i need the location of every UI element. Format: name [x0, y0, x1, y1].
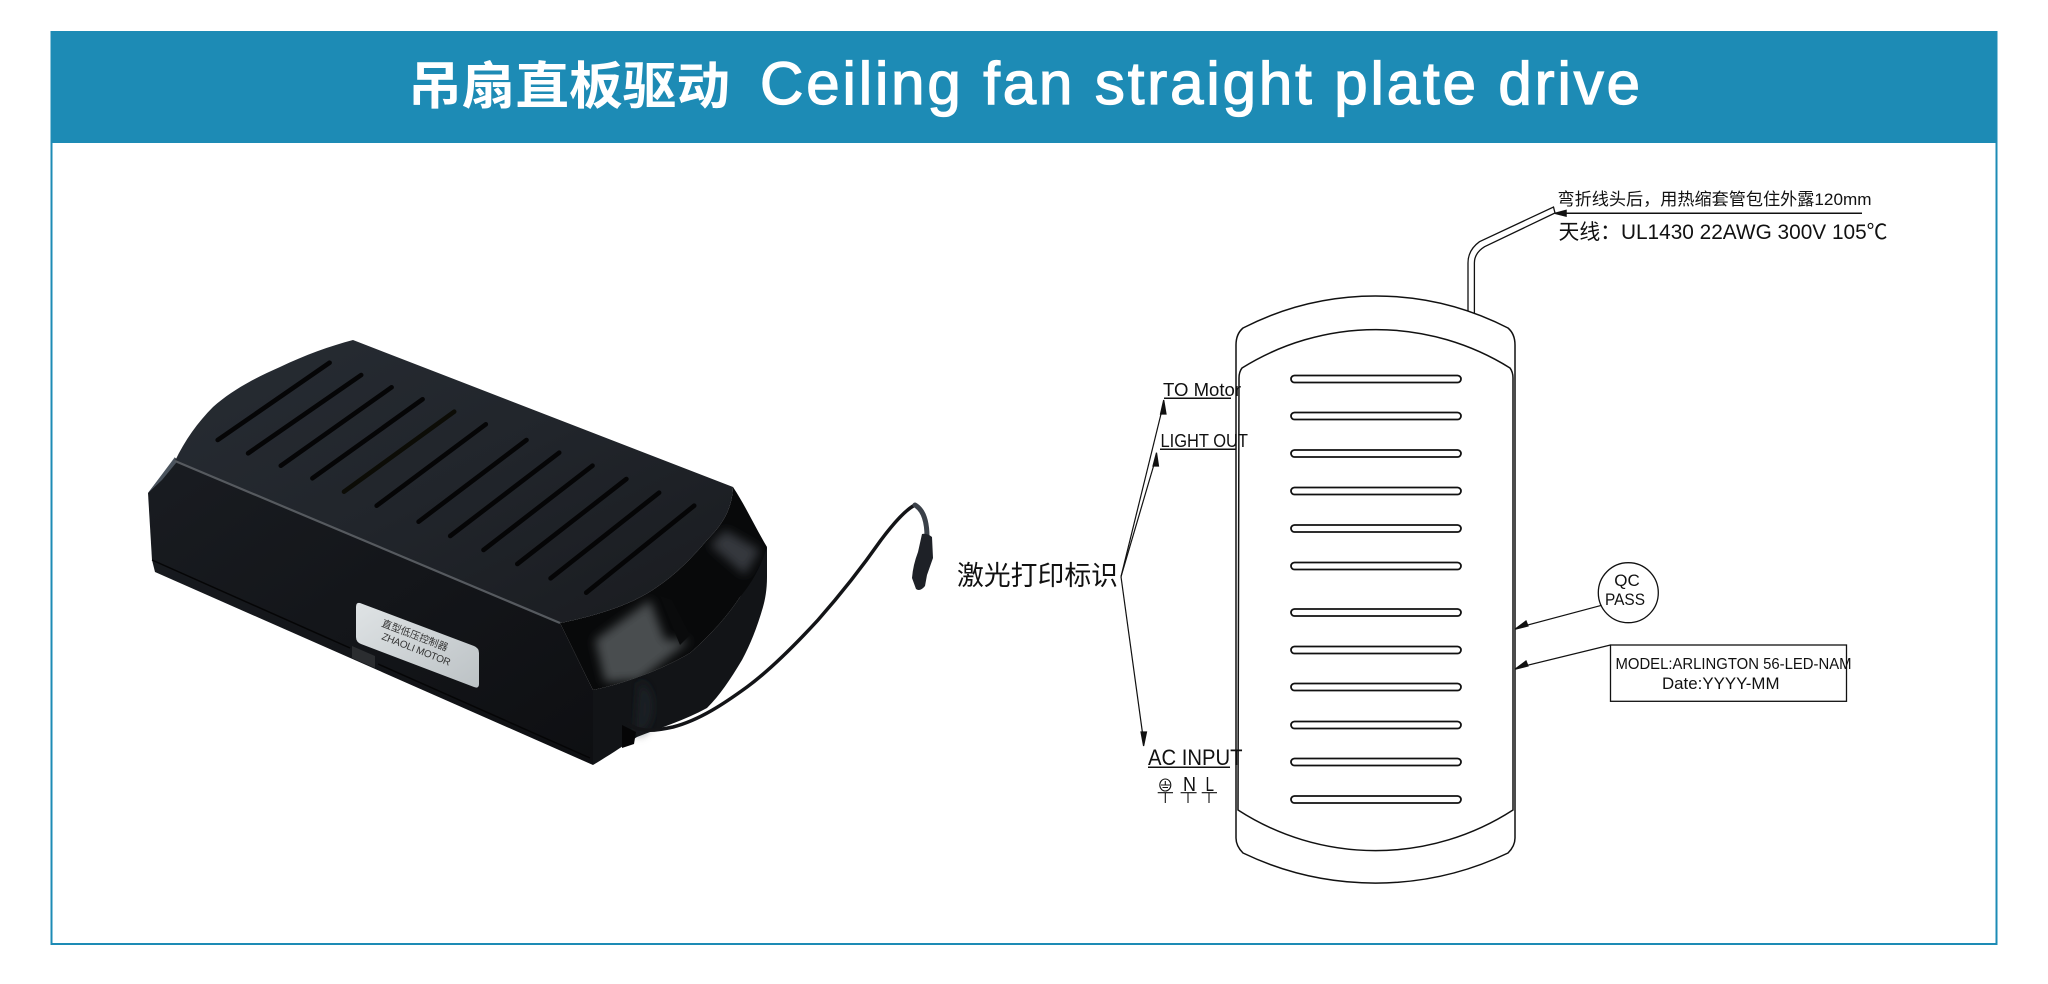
controller front face: [148, 458, 593, 765]
header band with title: 吊扇直板驱动: [408, 58, 730, 115]
model label arrow: [1515, 645, 1610, 669]
power cable: [627, 505, 915, 730]
technical drawing of the controller: [1121, 207, 1862, 883]
N pin label: N: [1183, 774, 1196, 796]
product photo: black controller box: [148, 340, 933, 765]
LIGHT OUT label: LIGHT OUT: [1160, 431, 1248, 451]
label underlines: [1148, 398, 1236, 767]
cable bend: [915, 505, 927, 537]
laser print leader arrows: [1121, 400, 1166, 746]
laser print mark label: 激光打印标识: [957, 561, 1118, 591]
product label: 直型低压控制器: [380, 617, 450, 654]
cable connector: [912, 534, 933, 590]
product label: [356, 603, 479, 688]
L pin label: L: [1206, 774, 1214, 796]
antenna bend note: 弯折线头后，用热缩套管包住外露120mm: [1558, 190, 1872, 209]
end cap glossy reflections: [595, 530, 760, 682]
side switch: [352, 646, 375, 668]
model text: MODEL:ARLINGTON 56-LED-NAM: [1616, 656, 1852, 673]
QC label: QC: [1614, 571, 1640, 590]
PASS label: PASS: [1605, 590, 1645, 609]
antenna specification: 天线：UL1430 22AWG 300V 105℃: [1558, 221, 1888, 244]
model label box: [1610, 645, 1846, 701]
controller lower end body: [593, 547, 767, 765]
product label: ZHAOLI MOTOR: [380, 632, 452, 669]
QC pass circle: [1598, 563, 1658, 623]
ventilation slots: [218, 363, 694, 593]
lower end reflection: [636, 680, 652, 735]
AC input pin symbols: [1158, 779, 1217, 803]
AC INPUT label: AC INPUT: [1148, 745, 1242, 770]
TO Motor label: TO Motor: [1163, 380, 1241, 400]
antenna wire: [1468, 207, 1555, 313]
top edge highlight: [175, 461, 560, 623]
housing inner outline: [1238, 330, 1513, 851]
QC arrow: [1515, 605, 1602, 629]
controller end cap band: [560, 487, 767, 690]
date text: Date:YYYY-MM: [1662, 674, 1780, 693]
cable exit recess: [622, 725, 636, 748]
base seam: [152, 560, 590, 758]
controller top surface: [175, 340, 733, 623]
header band with title: [51, 31, 1997, 143]
housing outer outline: [1236, 296, 1515, 883]
vent slots on drawing: [1291, 376, 1461, 803]
antenna leader with arrow: [1555, 210, 1862, 216]
left corner facet: [148, 457, 176, 493]
header band with title: Ceiling fan straight plate drive: [760, 50, 1640, 117]
